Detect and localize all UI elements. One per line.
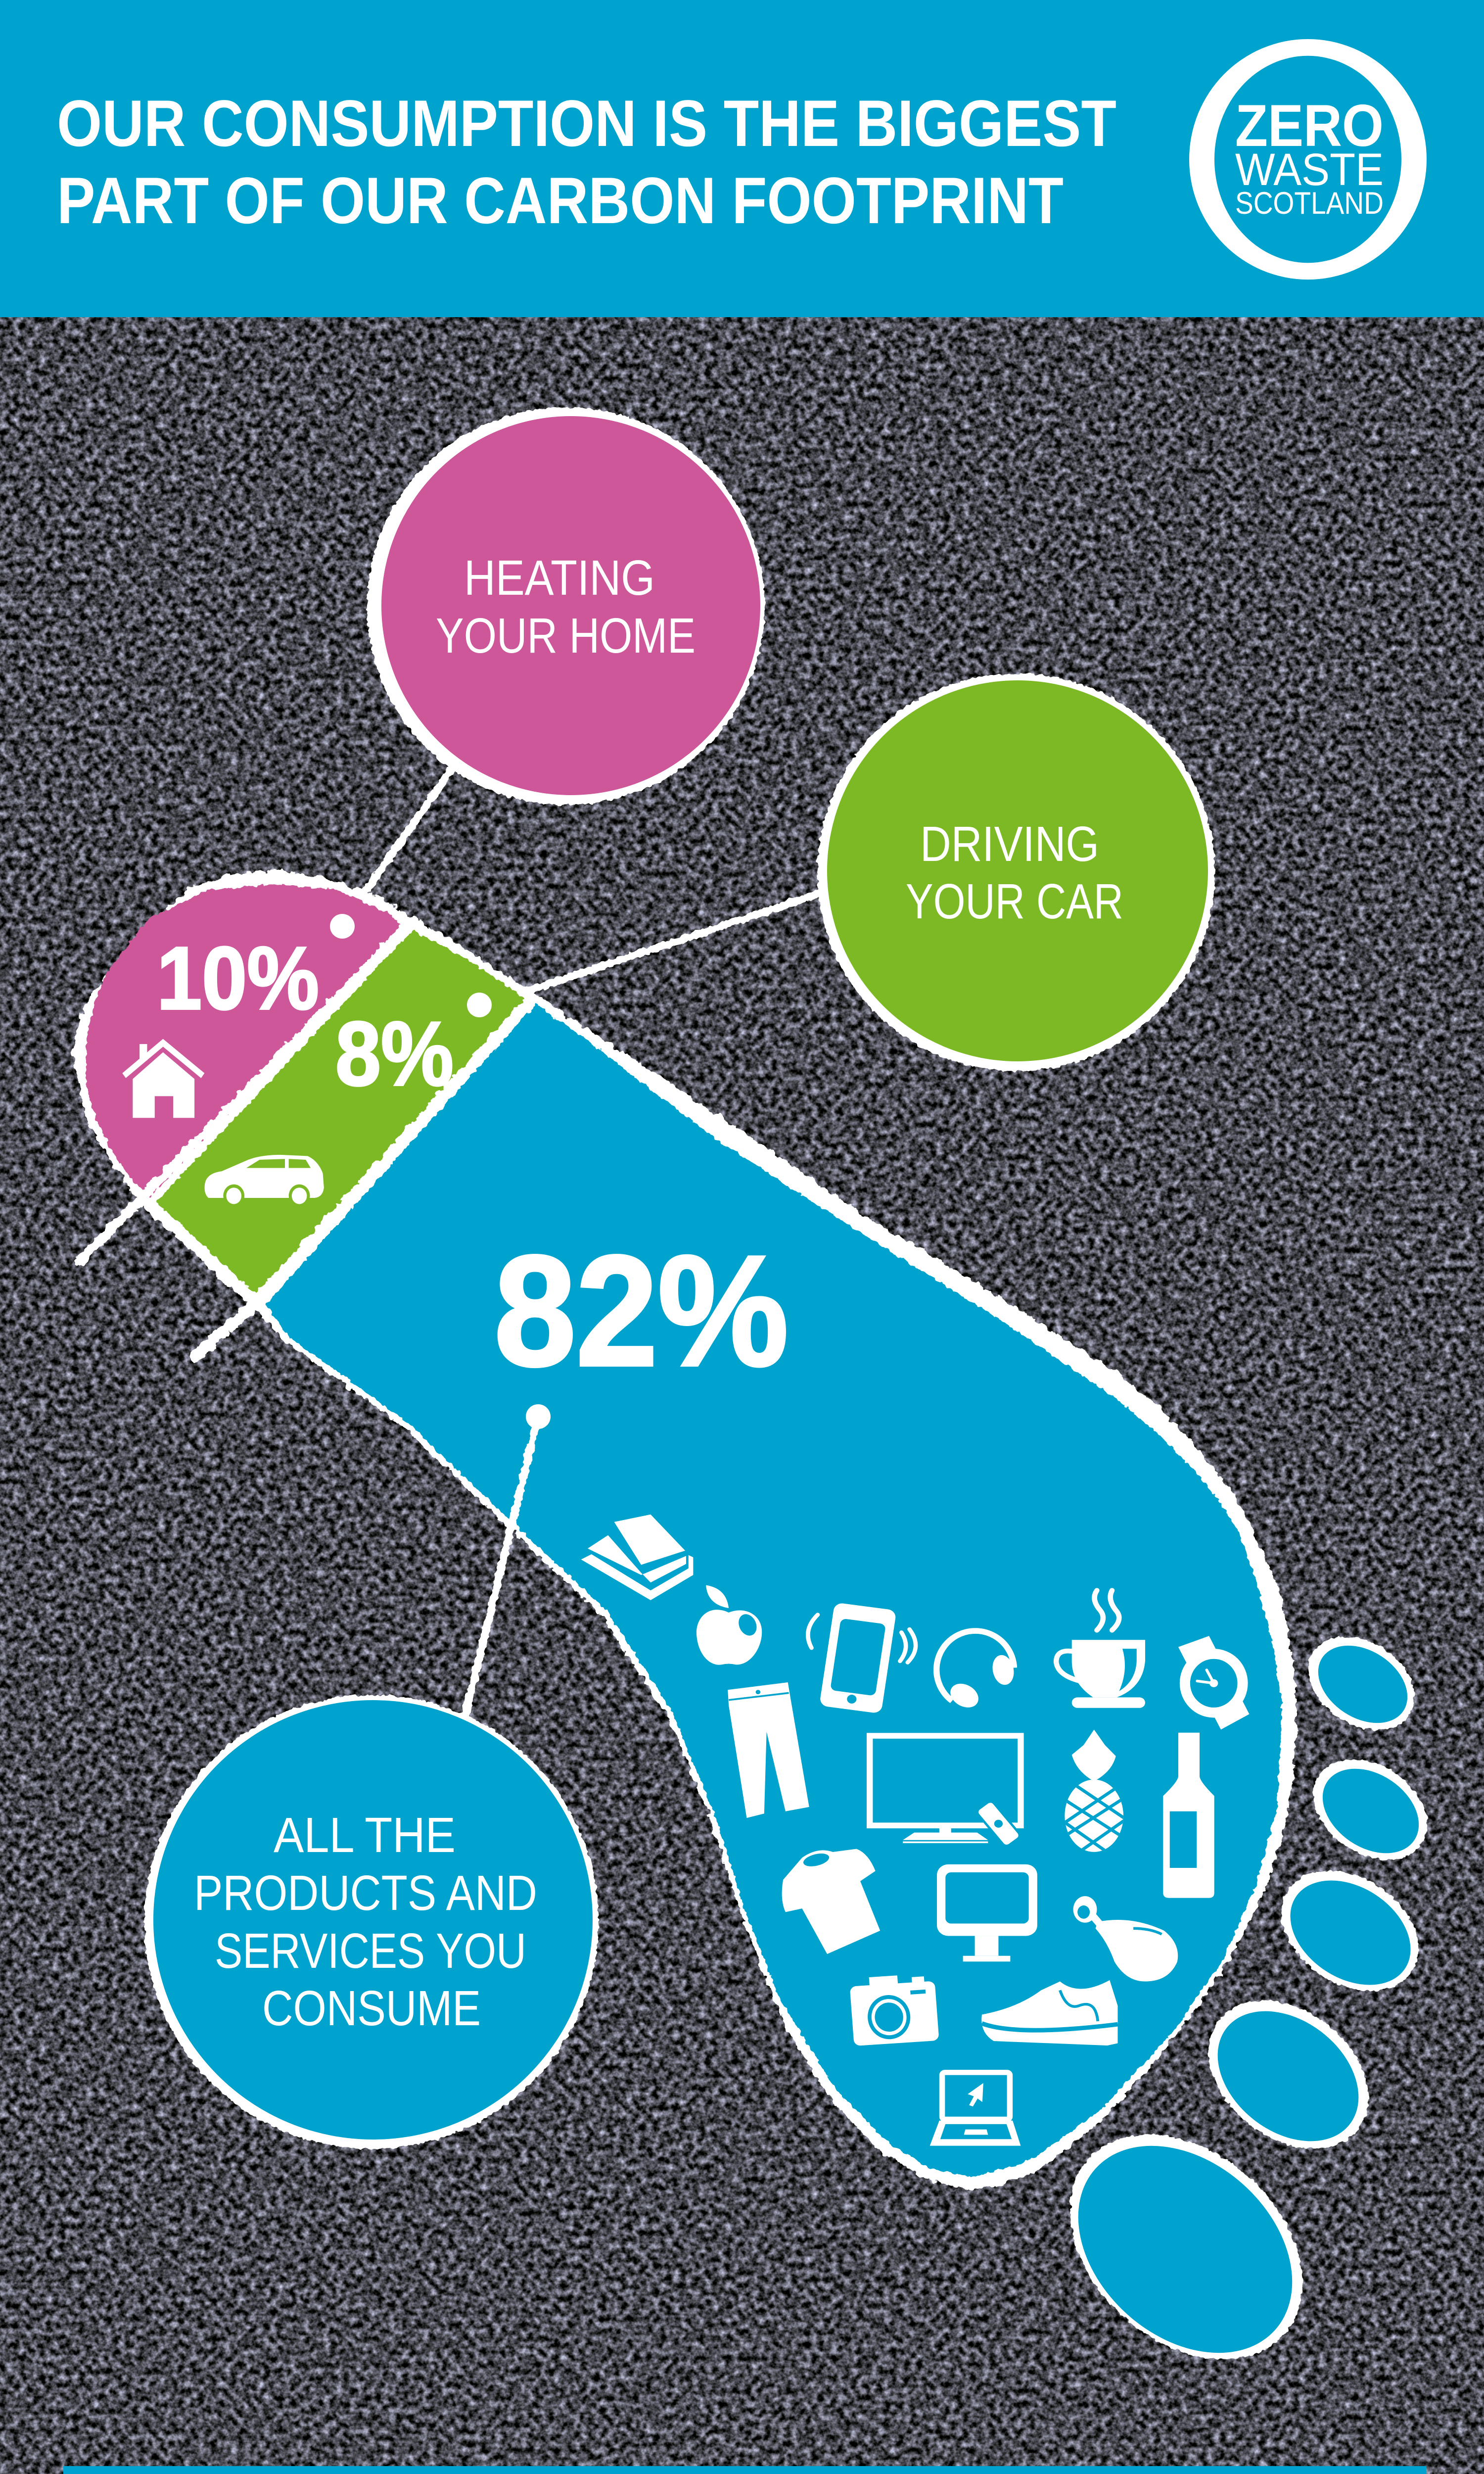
icon: house <box>124 1043 203 1118</box>
icon: car <box>205 1155 324 1207</box>
toes <box>1025 1618 1446 2405</box>
logo: Zero Waste Scotland: SCOTLAND <box>1235 186 1384 221</box>
icon: monitor <box>937 1864 1037 1961</box>
callout line: products <box>465 1417 538 1714</box>
label: driving your car: YOUR CAR <box>906 874 1123 929</box>
icon: headphones <box>936 1631 1016 1713</box>
divider: pink and green <box>80 926 408 1261</box>
icon: t-shirt <box>782 1849 880 1954</box>
panel: bottom message <box>63 2466 1426 2474</box>
callout line: heating <box>342 770 451 926</box>
icon: phone <box>808 1602 916 1713</box>
panel: heating circle <box>367 407 765 805</box>
dot: heating <box>330 914 355 939</box>
panel: header band <box>0 0 1484 317</box>
toe 4 <box>1180 1970 1397 2179</box>
pink section: 10 percent <box>87 885 400 1196</box>
blue section: 82 percent <box>267 1005 1280 2176</box>
foot white outline <box>74 872 1295 2188</box>
label: heating your home: HEATING <box>464 550 655 606</box>
icon: shoe <box>981 1980 1118 2046</box>
green section: 8 percent <box>157 931 524 1294</box>
icon: wine bottle <box>1163 1733 1214 1898</box>
icons: consumer goods <box>581 1515 1249 2146</box>
icon: television <box>870 1736 1021 1848</box>
label: heating your home <box>436 550 696 664</box>
logo: Zero Waste Scotland: WASTE <box>1235 144 1384 195</box>
icon: watch <box>1178 1636 1249 1730</box>
label: all the products and services you consume: SERVICES YOU <box>215 1923 526 1979</box>
dot: products <box>526 1404 551 1429</box>
stat: 82 percent: 82% <box>494 1223 788 1399</box>
icon: books <box>581 1515 693 1600</box>
panel: driving circle <box>817 673 1215 1071</box>
icon: laptop <box>930 2072 1020 2146</box>
toe 1 <box>1291 1618 1432 1749</box>
label: all the products and services you consume <box>194 1808 537 2036</box>
icon: apple <box>696 1585 762 1665</box>
label: heating your home: YOUR HOME <box>436 608 696 664</box>
panel: footprint sole <box>74 872 1295 2188</box>
title: OUR CONSUMPTION IS THE BIGGEST <box>57 87 1116 160</box>
toe 3 <box>1259 1846 1441 2015</box>
stat: 8 percent: 8% <box>335 1002 454 1104</box>
label: driving your car <box>906 816 1123 929</box>
logo: Zero Waste Scotland: ZERO <box>1235 93 1384 159</box>
panel: products circle <box>144 1695 599 2149</box>
icon: pineapple <box>1055 1730 1140 1856</box>
label: driving your car: DRIVING <box>920 816 1099 872</box>
divider: green and blue <box>197 1001 530 1356</box>
toe 5 <box>1025 2089 1347 2405</box>
label: all the products and services you consume: ALL THE <box>274 1808 456 1863</box>
dot: driving <box>467 993 492 1017</box>
logo: Zero Waste Scotland <box>1189 39 1427 280</box>
icon: camera <box>849 1973 939 2046</box>
label: all the products and services you consume: PRODUCTS AND <box>194 1865 537 1921</box>
callout line: driving <box>476 893 821 1004</box>
stat: 10 percent: 10% <box>157 929 319 1028</box>
title: PART OF OUR CARBON FOOTPRINT <box>57 164 1064 238</box>
icon: chicken leg <box>1073 1896 1178 1982</box>
label: all the products and services you consume: CONSUME <box>262 1981 481 2036</box>
icon: jeans <box>728 1682 809 1818</box>
icon: coffee cup <box>1056 1590 1145 1708</box>
title <box>57 87 1116 238</box>
toe 2 <box>1295 1738 1446 1881</box>
